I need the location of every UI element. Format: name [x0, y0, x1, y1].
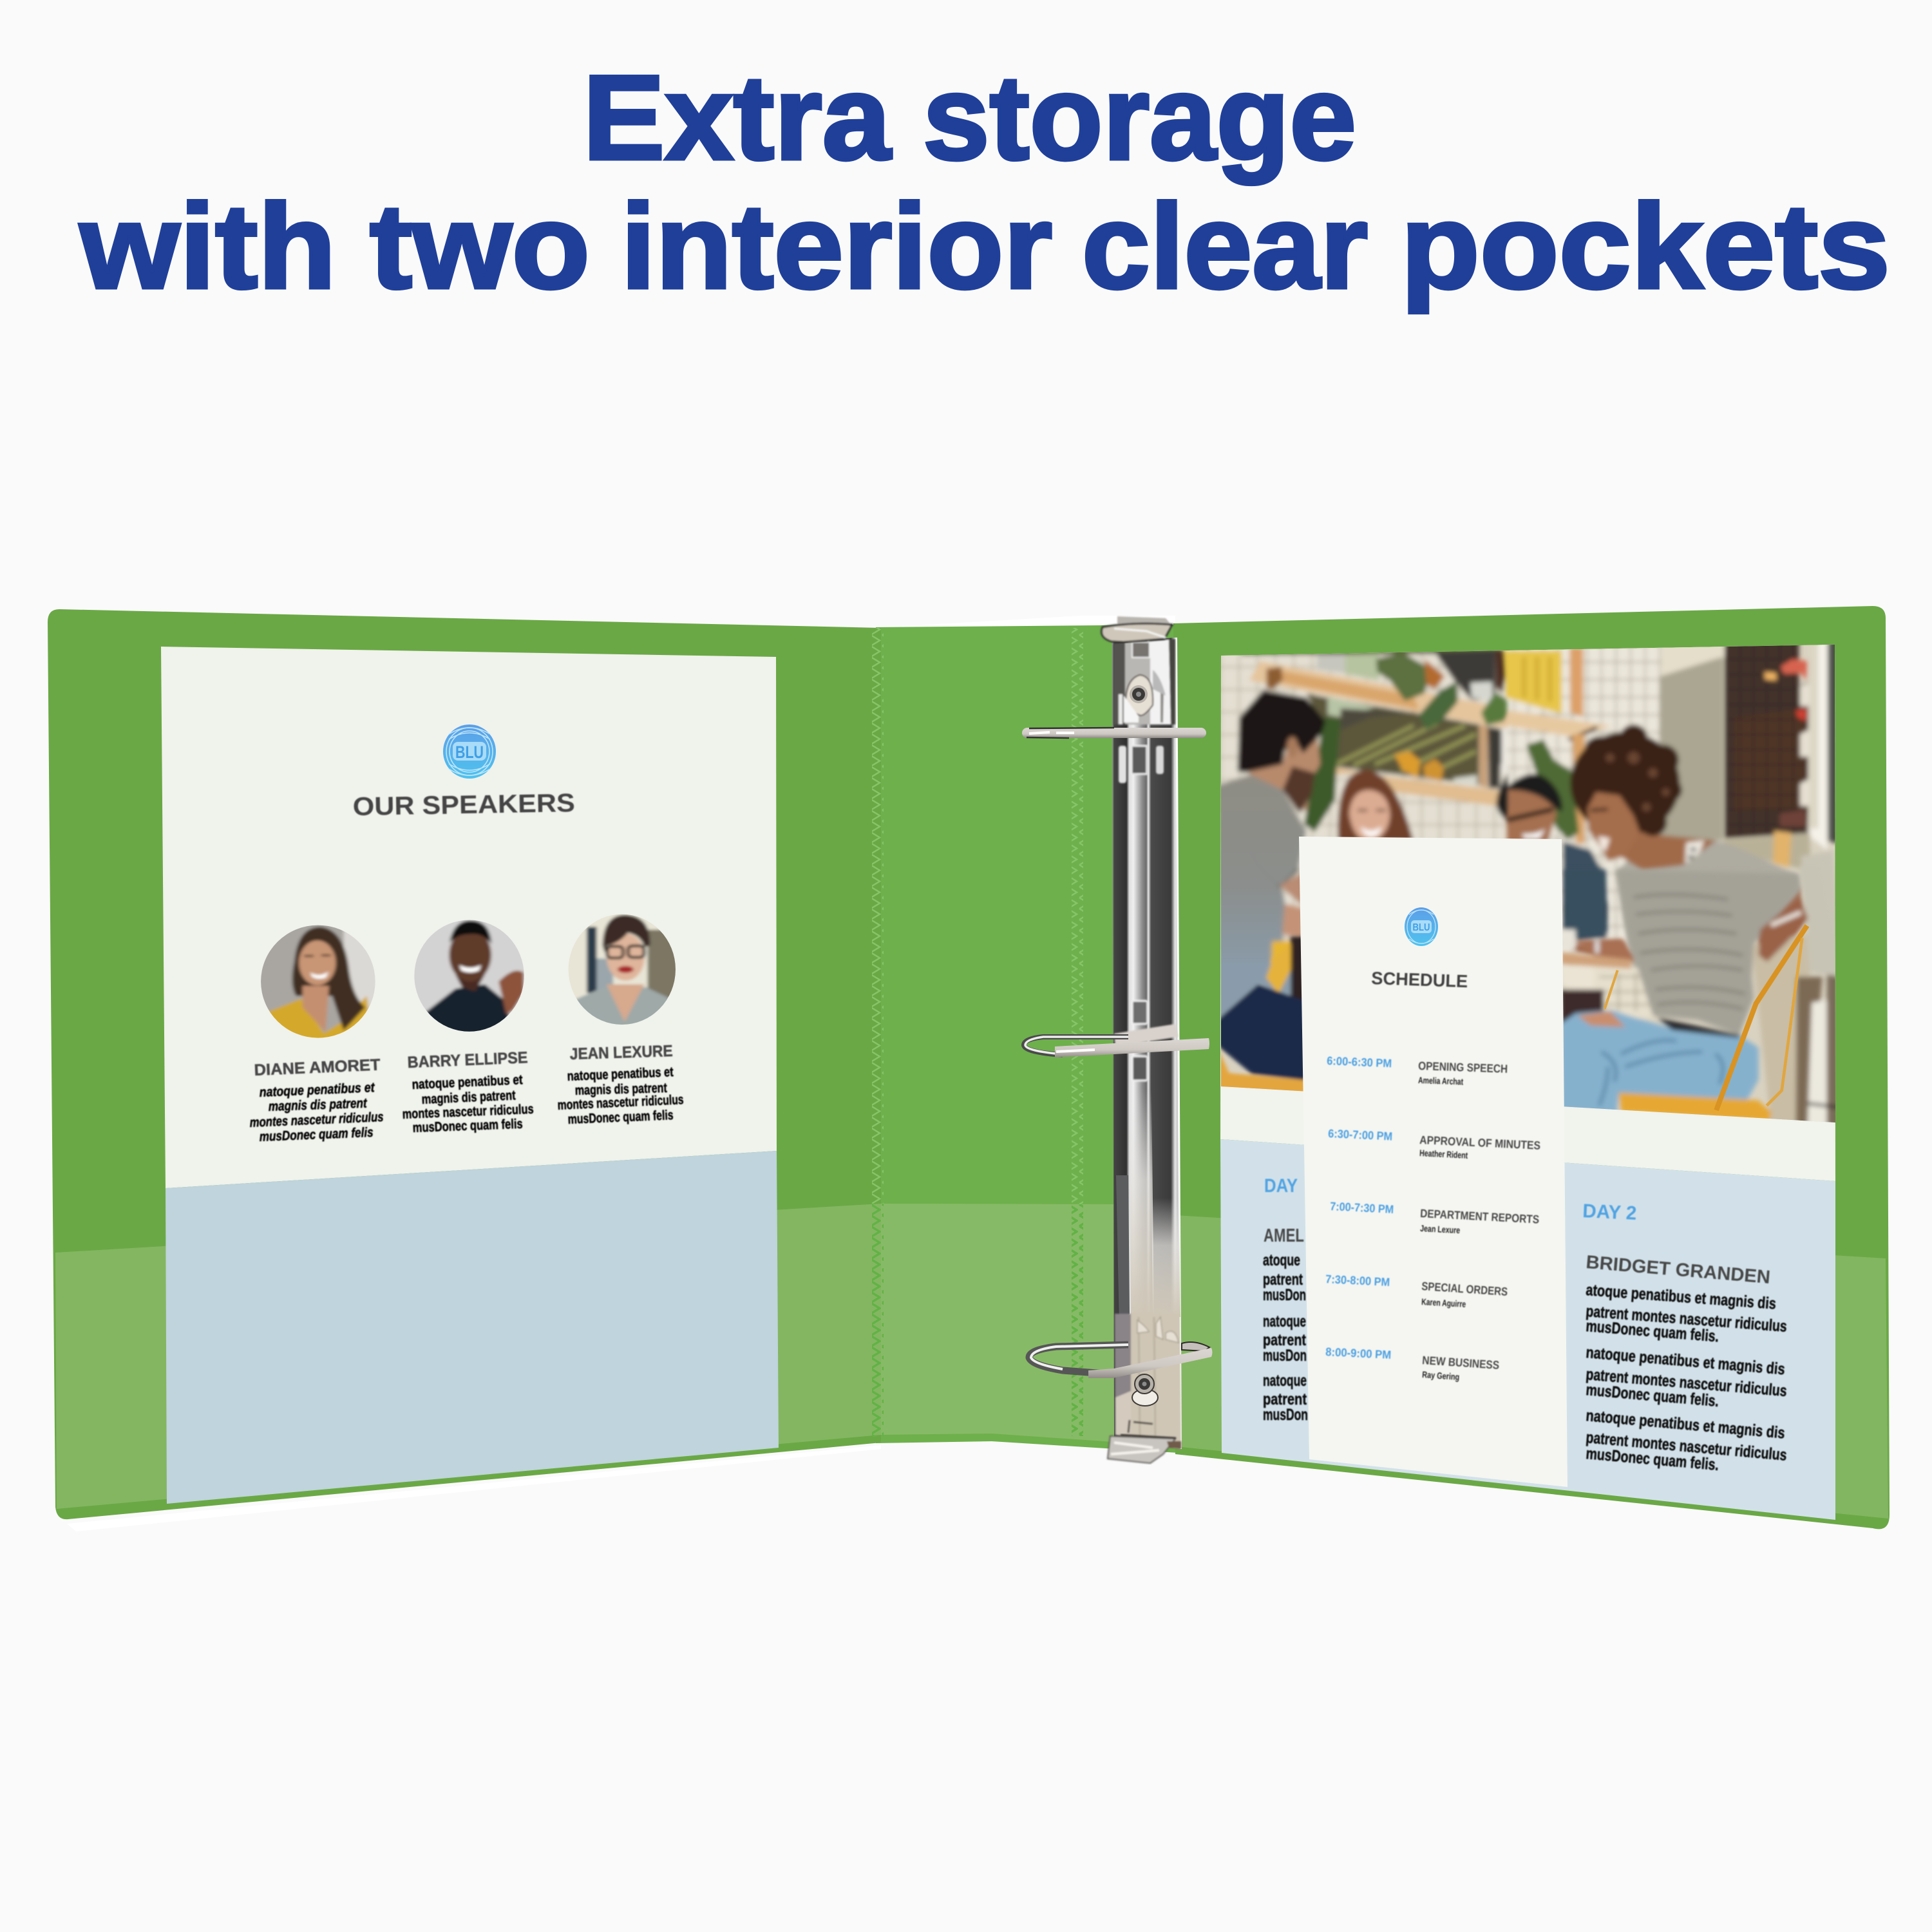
spine clear pocket [881, 1204, 1179, 1446]
body paragraphs [1585, 1281, 1788, 1474]
day 1 column text [1263, 1175, 1308, 1424]
clips under ring 1 [1119, 746, 1164, 783]
body text column: natoque [1263, 1312, 1306, 1331]
sheet paper [1220, 645, 1835, 1181]
body text column: musDon [1263, 1406, 1308, 1424]
icon: BLU logo small [1405, 907, 1438, 946]
label: day 1: DAY [1264, 1175, 1298, 1197]
spine seam stitching right [1072, 628, 1083, 1436]
icon: BLU logo: BLU [455, 743, 484, 762]
row: new business: NEW BUSINESS [1422, 1354, 1500, 1372]
speaker: Diane Amoret: montes nascetur ridiculus [249, 1110, 384, 1130]
body paragraphs: natoque penatibus et magnis dis [1585, 1406, 1786, 1443]
heading: schedule: SCHEDULE [1371, 968, 1468, 991]
top end cap [1102, 616, 1172, 642]
body paragraphs: patrent montes nascetur ridiculus [1585, 1428, 1788, 1464]
icon: BLU logo small: BLU [1413, 922, 1430, 933]
sheet blue band [166, 1151, 779, 1504]
name: Bridget Granden: BRIDGET GRANDEN [1585, 1252, 1771, 1288]
left cover [48, 609, 881, 1519]
body text column: musDon [1263, 1347, 1307, 1365]
panel: left sheet our speakers [161, 647, 779, 1504]
binder spine panel [876, 625, 1179, 1453]
card paper [1299, 837, 1567, 1487]
sheet blue band [1220, 1139, 1835, 1520]
speaker: Barry Ellipse: BARRY ELLIPSE [407, 1048, 528, 1072]
portrait: Jean Lexure [568, 914, 676, 1025]
title: with [79, 179, 336, 314]
rail bottom plate [1115, 1314, 1181, 1449]
sheet paper [161, 647, 777, 1188]
portrait: Diane Amoret [261, 925, 375, 1038]
row: approval of minutes: 6:30-7:00 PM [1328, 1127, 1393, 1143]
row: department reports: Jean Lexure [1420, 1223, 1461, 1235]
speaker: Barry Ellipse: magnis dis patrent [421, 1088, 516, 1107]
title: Extra [583, 50, 892, 185]
body paragraphs: patrent montes nascetur ridiculus [1586, 1302, 1788, 1336]
row: opening speech [1327, 1054, 1508, 1086]
body text column [1263, 1251, 1308, 1424]
photo left half: shelves, man, woman [1212, 649, 1547, 974]
bottom end cap [1108, 1435, 1181, 1463]
body paragraphs: musDonec quam felis. [1585, 1444, 1719, 1474]
title: two [370, 179, 590, 314]
title: clear [1082, 179, 1368, 314]
title: pockets [1401, 179, 1890, 314]
photo lower right: jeans, chair, rail [1560, 865, 1842, 1132]
speaker: Jean Lexure: magnis dis patrent [574, 1081, 667, 1098]
speaker: Barry Ellipse [402, 1048, 534, 1135]
speaker: Jean Lexure [557, 1042, 684, 1127]
right clear pocket [1175, 1215, 1888, 1519]
speaker: Barry Ellipse: montes nascetur ridiculus [402, 1102, 534, 1122]
photo right half: tiles, window, woman [1507, 639, 1842, 971]
yellow chair frame [1605, 925, 1807, 1110]
row: opening speech: 6:00-6:30 PM [1327, 1054, 1392, 1070]
speaker names and bios [249, 1042, 684, 1144]
rail lower shine [1116, 1088, 1180, 1327]
photo backdrop [1217, 641, 1839, 1130]
title: interior [621, 179, 1052, 314]
title: storage [923, 50, 1356, 185]
icon: BLU logo [443, 724, 496, 779]
row: department reports: DEPARTMENT REPORTS [1420, 1207, 1540, 1226]
bottom rivet [1132, 1374, 1158, 1406]
rail top plate [1113, 639, 1175, 724]
body text column: atoque [1263, 1251, 1300, 1269]
name: Amelia: AMEL [1264, 1226, 1304, 1246]
row: new business: 8:00-9:00 PM [1325, 1345, 1392, 1361]
ring 1 [1022, 728, 1206, 738]
title [79, 50, 1890, 314]
body text column: patrent [1263, 1331, 1307, 1349]
row: special orders: SPECIAL ORDERS [1421, 1280, 1508, 1298]
row: new business [1325, 1345, 1500, 1382]
metal rail [1112, 638, 1180, 1449]
row: department reports: 7:00-7:30 PM [1330, 1200, 1394, 1216]
row: special orders: Karen Aguirre [1421, 1296, 1466, 1309]
speaker: Diane Amoret: DIANE AMORET [254, 1056, 381, 1079]
body paragraphs: atoque penatibus et magnis dis [1586, 1281, 1777, 1313]
photo: friends at cafe table [1212, 639, 1842, 1132]
row: opening speech: Amelia Archat [1418, 1075, 1464, 1086]
speaker: Jean Lexure: JEAN LEXURE [569, 1042, 673, 1063]
photo bottom left: jeans and chair [1221, 934, 1303, 1091]
schedule card [1299, 837, 1567, 1487]
right cover [1173, 606, 1889, 1529]
body text column: patrent [1263, 1271, 1303, 1289]
row: department reports [1330, 1200, 1540, 1235]
ring 2 [1024, 1037, 1209, 1057]
body paragraphs: natoque penatibus et magnis dis [1585, 1343, 1786, 1378]
speaker: Barry Ellipse: natoque penatibus et [412, 1072, 523, 1092]
body paragraphs: patrent montes nascetur ridiculus [1585, 1365, 1788, 1400]
speaker: Jean Lexure: natoque penatibus et [567, 1065, 674, 1084]
label: day 2: DAY 2 [1582, 1200, 1637, 1224]
body paragraphs: musDonec quam felis. [1585, 1381, 1719, 1410]
page edge behind left cover [67, 1445, 881, 1531]
body paragraphs: musDonec quam felis. [1586, 1317, 1719, 1346]
middle clip [1114, 1001, 1179, 1081]
day 2 column text [1582, 1200, 1788, 1474]
speaker: Diane Amoret: natoque penatibus et [259, 1080, 375, 1100]
spine seam stitching left [872, 628, 884, 1437]
speaker: Jean Lexure: montes nascetur ridiculus [557, 1092, 684, 1113]
row: approval of minutes [1328, 1127, 1541, 1160]
body text column: patrent [1263, 1390, 1307, 1408]
ring 3 [1029, 1342, 1212, 1378]
rail bright edge [1175, 638, 1182, 1449]
top rivet [1130, 685, 1148, 703]
row: new business: Ray Gering [1422, 1369, 1460, 1382]
row: approval of minutes: Heather Rident [1419, 1148, 1468, 1160]
portrait: Barry Ellipse [414, 920, 524, 1032]
speaker: Diane Amoret: magnis dis patrent [268, 1096, 368, 1114]
row: special orders: 7:30-8:00 PM [1325, 1273, 1390, 1289]
left clear pocket [55, 1204, 881, 1509]
page edge behind binder top [882, 616, 1175, 627]
binder ring mechanism [1022, 616, 1212, 1463]
row: opening speech: OPENING SPEECH [1418, 1059, 1508, 1075]
speaker: Diane Amoret [249, 1056, 384, 1144]
body text column: natoque [1263, 1372, 1307, 1390]
speaker: Diane Amoret: musDonec quam felis [259, 1125, 374, 1144]
speaker: Barry Ellipse: musDonec quam felis [412, 1117, 523, 1135]
row: approval of minutes: APPROVAL OF MINUTES [1419, 1133, 1541, 1152]
panel: right sheet schedule [1212, 639, 1842, 1520]
open binder [48, 606, 1889, 1531]
row: special orders [1325, 1273, 1508, 1309]
schedule rows [1325, 1054, 1541, 1382]
body text column: musDon [1263, 1286, 1306, 1304]
speaker: Jean Lexure: musDonec quam felis [567, 1108, 674, 1127]
heading: our speakers: OUR SPEAKERS [352, 789, 575, 821]
